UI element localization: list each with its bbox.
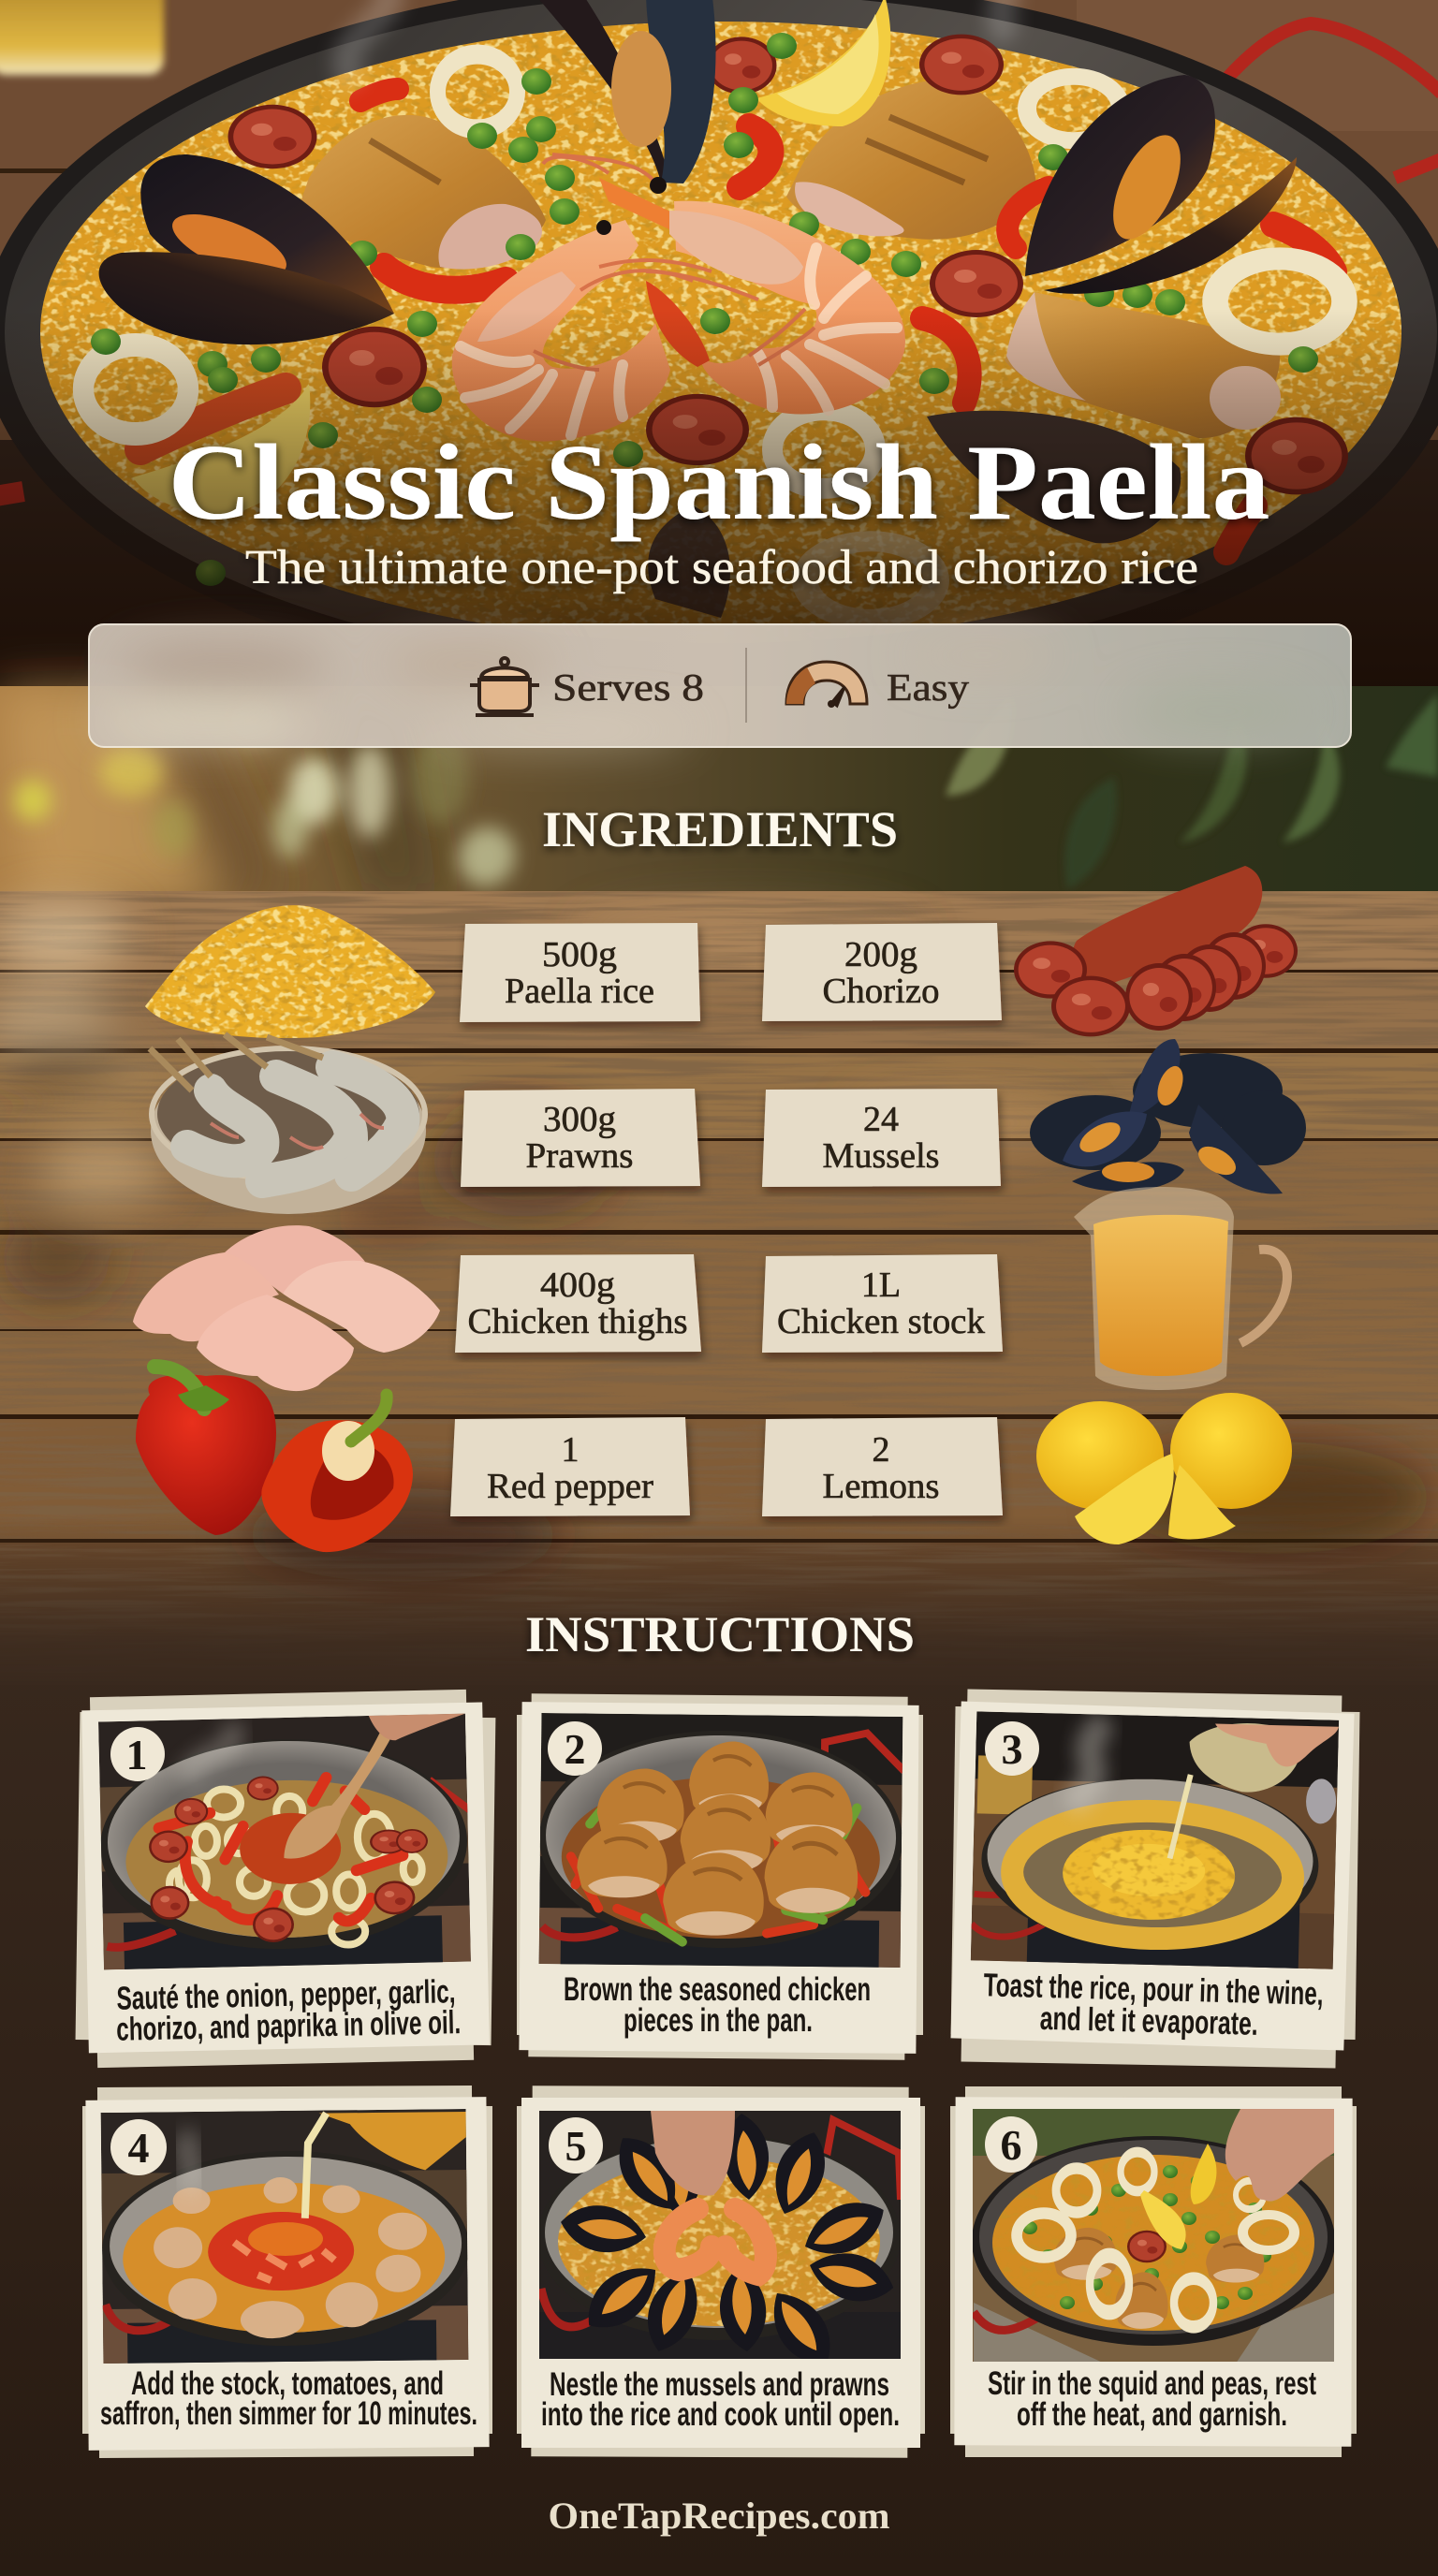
icon: red peppers — [136, 1367, 413, 1552]
difficulty text: Easy — [887, 666, 970, 709]
ingredient card: red pepper: 1 — [562, 1430, 579, 1470]
step 3 photo — [971, 1711, 1339, 1970]
red pan handles — [0, 17, 1438, 505]
page background — [0, 1591, 1438, 2576]
step 3 card — [950, 1690, 1359, 2068]
squid rings — [83, 54, 1344, 620]
ingredient card: red pepper: Red pepper — [487, 1467, 653, 1506]
icon: mussels pile — [1030, 1039, 1306, 1194]
step 4 number badge — [110, 2119, 167, 2175]
step 6 number badge — [985, 2116, 1037, 2173]
instructions heading: INSTRUCTIONS — [525, 1606, 915, 1662]
ingredient card: mussels: 24 — [863, 1100, 899, 1139]
step 1 text: chorizo, and paprika in olive oil. — [116, 2004, 462, 2048]
step 2 number badge: 2 — [564, 1725, 586, 1773]
serves text: Serves 8 — [552, 666, 704, 709]
step 2 text — [564, 1971, 871, 2039]
step 2 number badge — [548, 1721, 602, 1776]
ingredient card: red pepper — [450, 1417, 690, 1516]
icon: cooking pot — [470, 658, 539, 715]
hero dark fade — [0, 309, 1438, 686]
step 6 card — [950, 2086, 1357, 2457]
stats panel: serves and difficulty — [89, 624, 1351, 747]
icon: jug of chicken stock — [1074, 1187, 1287, 1390]
step 1 number badge: 1 — [125, 1731, 148, 1778]
icon: bowl of prawns — [150, 1034, 426, 1214]
step 2 card — [517, 1693, 923, 2060]
step 1 text — [115, 1973, 462, 2048]
step 1 photo — [97, 1708, 476, 1979]
step 1 number badge — [110, 1727, 165, 1781]
wooden table — [0, 891, 1438, 1685]
icon: chorizo — [1014, 866, 1298, 1036]
icon: paella rice pile — [145, 905, 435, 1038]
icon: difficulty gauge — [786, 662, 867, 708]
lemon wedges — [133, 0, 890, 515]
ingredient card: prawns — [461, 1089, 700, 1187]
ingredient card: lemons — [762, 1417, 1003, 1516]
step 5 text — [541, 2366, 900, 2433]
step 6 text — [988, 2365, 1316, 2433]
step 3 number badge — [985, 1721, 1039, 1776]
step 2 text: Brown the seasoned chicken — [564, 1971, 871, 2008]
subtitle: The ultimate one-pot seafood and chorizo rice — [245, 541, 1198, 594]
step 5 card — [517, 2086, 925, 2458]
step 4 text: saffron, then simmer for 10 minutes. — [100, 2395, 477, 2432]
chorizo slices — [228, 35, 1348, 494]
step 2 text: pieces in the pan. — [624, 2002, 813, 2039]
prawns — [452, 154, 905, 442]
step 3 text: and let it evaporate. — [1039, 2000, 1258, 2042]
icon: raw chicken thighs — [133, 1225, 440, 1391]
step 5 number badge — [549, 2117, 603, 2174]
ingredient card: paella rice — [460, 923, 700, 1022]
step 4 text — [100, 2365, 477, 2432]
ingredient card: mussels: Mussels — [822, 1136, 940, 1176]
step 1 text: Sauté the onion, pepper, garlic, — [116, 1973, 456, 2017]
chicken thighs — [298, 80, 1281, 438]
step 1 card — [76, 1690, 495, 2068]
step 4 photo — [101, 2109, 470, 2370]
pan body — [0, 0, 1438, 513]
ingredient card: lemons: 2 — [873, 1430, 889, 1470]
ingredient card: chicken stock: Chicken stock — [777, 1302, 985, 1341]
ingredient card: chorizo: Chorizo — [822, 972, 940, 1011]
ingredient card: chorizo: 200g — [844, 935, 917, 974]
step 4 card — [82, 2086, 492, 2458]
mussels — [99, 0, 1297, 618]
red pepper strips — [140, 89, 1334, 552]
saffron rice — [40, 22, 1401, 643]
ingredients heading: INGREDIENTS — [542, 801, 898, 857]
step 4 number badge: 4 — [127, 2124, 150, 2172]
step 5 text: into the rice and cook until open. — [541, 2396, 900, 2433]
beer glass — [0, 0, 164, 75]
step 3 number badge: 3 — [1002, 1725, 1022, 1773]
ingredient card: chicken stock — [762, 1254, 1003, 1353]
green peas — [91, 33, 1318, 586]
step 3 text — [982, 1967, 1324, 2044]
icon: lemons — [1036, 1393, 1292, 1544]
ingredient card: mussels — [762, 1089, 1001, 1187]
step 5 number badge: 5 — [565, 2122, 586, 2170]
step 6 number badge: 6 — [1000, 2121, 1022, 2169]
steam — [346, 0, 1011, 84]
ingredient card: chorizo — [762, 923, 1002, 1021]
garden band background — [0, 686, 1438, 899]
ingredient card: chicken thighs: 400g — [540, 1266, 615, 1305]
ingredient card: prawns: Prawns — [526, 1136, 633, 1176]
ingredient card: chicken thighs — [455, 1254, 701, 1353]
step 5 text: Nestle the mussels and prawns — [550, 2366, 889, 2403]
step 4 text: Add the stock, tomatoes, and — [131, 2365, 444, 2402]
hero: paella pan photo — [0, 0, 1438, 697]
title: Classic Spanish Paella — [169, 423, 1269, 543]
ingredient card: paella rice: 500g — [542, 935, 617, 974]
step 6 photo — [972, 2109, 1335, 2364]
footer website: OneTapRecipes.com — [549, 2495, 889, 2537]
ingredient card: lemons: Lemons — [822, 1467, 940, 1506]
step 5 photo — [537, 2111, 901, 2378]
ingredient card: paella rice: Paella rice — [505, 972, 654, 1011]
ingredient card: chicken thighs: Chicken thighs — [468, 1302, 687, 1341]
ingredient card: chicken stock: 1L — [861, 1266, 901, 1305]
step 6 text: off the heat, and garnish. — [1017, 2396, 1287, 2433]
ingredient card: prawns: 300g — [543, 1100, 616, 1139]
step 2 photo — [538, 1713, 904, 1977]
